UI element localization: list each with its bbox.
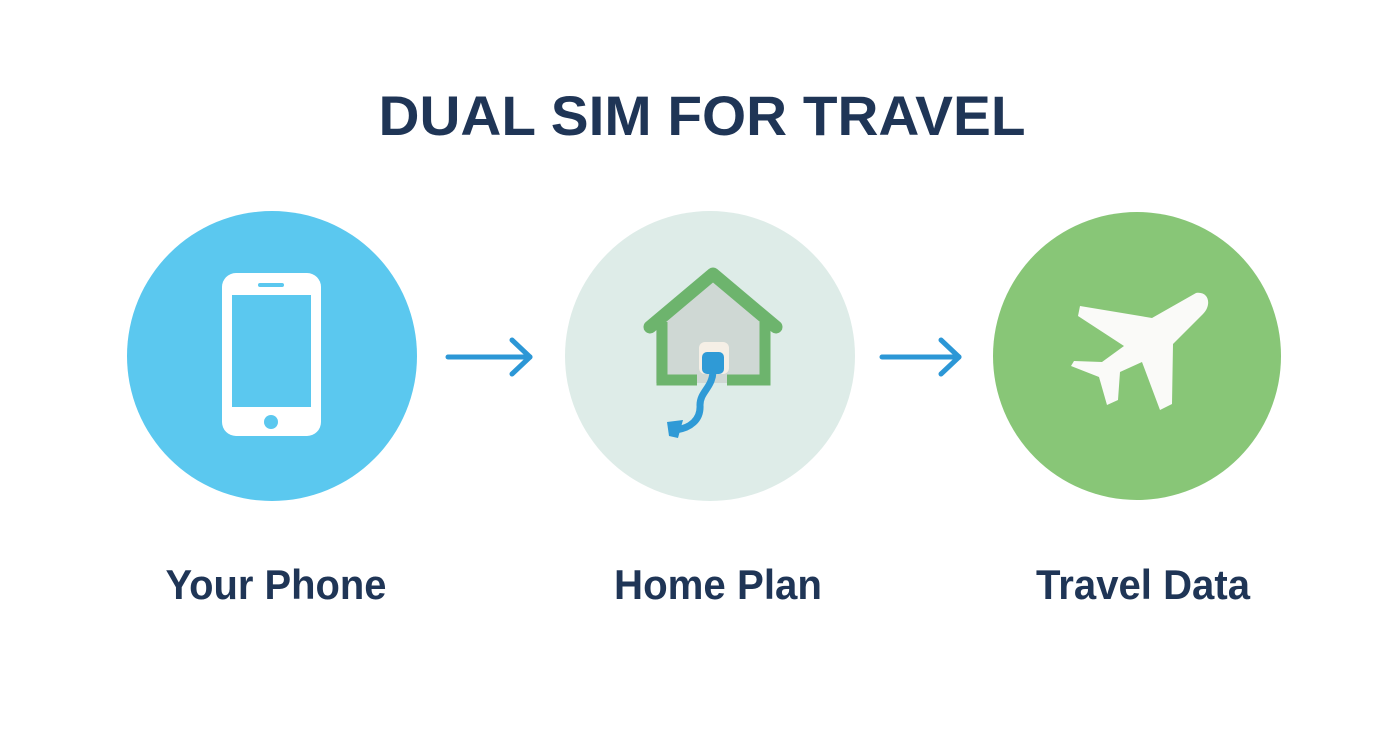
arrow 2: [882, 340, 959, 374]
circle: phone: [127, 211, 417, 501]
icon: home with plug: [650, 274, 776, 438]
panel: home plan: [565, 211, 855, 608]
arrow 1: [448, 340, 530, 374]
icon: plane: [1071, 293, 1208, 410]
title: DUAL SIM FOR TRAVEL: [378, 84, 1026, 147]
circle: home: [565, 211, 855, 501]
panel: your phone: [127, 211, 417, 608]
icon: phone: [222, 273, 321, 436]
label: your phone: Your Phone: [166, 561, 386, 608]
label: travel data: Travel Data: [1036, 561, 1251, 608]
circle: travel: [993, 212, 1281, 500]
panel: travel data: [993, 212, 1281, 608]
label: home plan: Home Plan: [614, 561, 822, 608]
